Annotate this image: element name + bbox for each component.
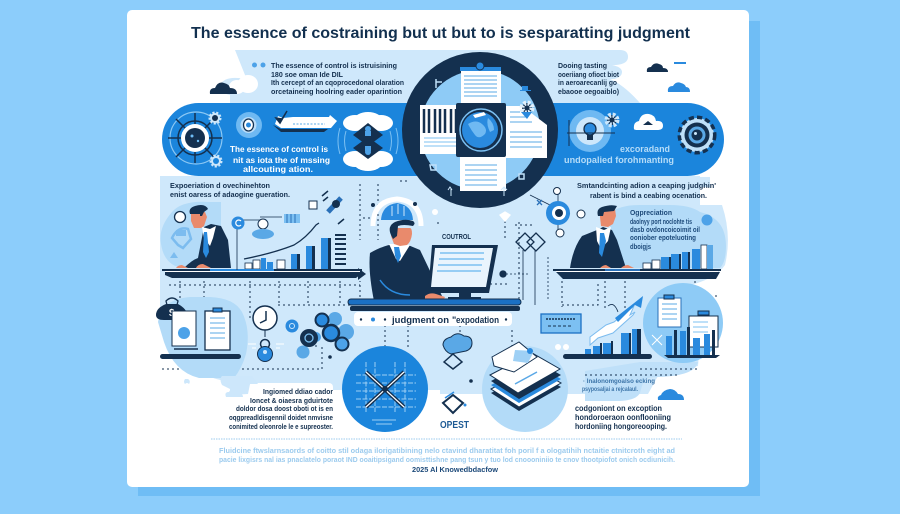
icon: bulb badge left [236,112,262,138]
light cloud bottom left [184,376,258,397]
small blue panel [541,314,581,333]
text block: bottom left [229,383,333,431]
icon: target node cluster right [530,188,585,237]
footer text: pacie lixgisrs nal ias pnaclatelo poraot IND ooaitipsigand oomisttishne pang tsun y tuo lod cnoooniniio te cnov thootpiofot onich ocdiunicih. [219,457,675,464]
icon: money bag [156,298,187,320]
icon: money bag: $ [169,308,175,319]
text block: section label left: enist oaress of adaogine gueration. [170,192,290,199]
text block: bottom right: hordoniing hongoreooping. [575,422,667,431]
icon: contract arrow to chart [590,296,643,345]
logo: OPEST [440,392,469,431]
icon: bubble cluster [296,312,354,359]
text block: pill right [564,144,674,165]
text block: top left intro [252,62,404,96]
desk: central [348,299,521,311]
gear on circle [522,103,532,113]
text block: top left intro: 180 soe oman Ide DIL [271,72,344,79]
text block: top left intro: orcetaineing hoolring eader oparintion [271,89,402,96]
monitor [428,245,498,299]
desk: left [162,268,366,280]
icon: linked clouds and diamonds [338,112,398,171]
text block: right analyst note [630,210,712,251]
text block: bottom right [575,404,671,431]
text block: note under chart: · Inalonomgoalso ecking [583,378,655,385]
trend arrow [244,223,319,259]
text block: bottom right: hondoroeraon oonflooniing [575,413,671,422]
text block: bottom left: doldor dosa doost oboti ot is en [236,406,333,413]
icon: padlock [248,340,284,362]
globe tile [456,103,506,157]
panel: central document circle [402,52,558,208]
text block: top left intro: The essence of control is istruisining [271,63,397,70]
icon: blue circuit circle [342,346,428,432]
text block: pill left: The essence of control is [230,144,328,154]
person: right analyst [570,205,634,268]
text block: bottom left: Ingiomed ddiao cador [263,389,333,396]
footer divider [211,438,682,440]
text block: pill right: undopalied forohmanting [564,155,674,165]
text block: top right intro: ooeriiang ofioct biot [558,72,620,79]
icon: target left [168,112,222,166]
text block: note under chart [582,378,655,393]
icon: banner arrow [273,111,337,132]
text block: bottom right: codgoniont on excoption [575,404,662,413]
icon: big gear [680,118,714,152]
text block: right analyst note: dasb ovdoncoicoimit oil [630,227,700,234]
person: left analyst [176,205,231,268]
text block: section label left: Expoeriation d ovechinehton [170,183,270,190]
footer text: Fluidcine ftwslarnsaords of coitto stil odaga ilorigatibining nelo ctavind dharatitat foh poril f a ologatihih nctaitie ctnitcroth eight ad [219,448,675,455]
text block: note under chart: psyposaljai a rejcalaul. [582,386,638,393]
blob bottom left behind clipboards [158,297,248,378]
label pill: judgment on exception: judgment on [391,315,449,325]
blob behind right person [610,205,726,268]
text block: right analyst note: ooniober epoteluoting [630,235,696,242]
label: control: COUTROL [442,234,472,241]
icon: coin c [286,320,298,332]
text block: top left intro: Ith cercept of an cqoprocedonal olaration [271,80,404,87]
central headset halo [371,199,438,226]
text block: top right intro [558,63,620,96]
icon: blue cloud bottom right [658,389,684,400]
label pill: judgment on exception: expodation [456,315,499,325]
desk: right [553,269,721,279]
light background wash [160,50,728,401]
icon: clipboard circle right [643,283,723,363]
icon: bulb badge right [567,110,617,152]
text block: bottom left: Ioncet & oiaesra gduirtote [250,398,333,405]
text block: section label right: rabent is bind a ceabing ocenation. [590,193,707,200]
right document [505,106,547,158]
label pill: judgment on exception [354,312,512,326]
person: central operator [370,220,445,301]
bar chart: right [643,245,713,269]
text block: bottom left: oqgpreadldisgennil doidet nmvisne [229,415,333,422]
text block: pill right: excoradand [620,144,670,154]
title: The essence of costraining but ut but to is sesparatting judgment [191,25,691,42]
icon: document stack circle [482,342,568,432]
footer text [219,448,675,474]
panel: blue pill band [162,103,724,176]
card [127,10,749,487]
left barcode document [420,105,460,154]
dark shelf bottom left [160,354,241,359]
text block: section label left [170,183,290,199]
text block: right analyst note: daolnyy port noclohte tis [630,219,692,226]
icon: diamond link [500,212,548,305]
text block: top right intro: Dooing tasting [558,63,607,70]
label pill: judgment on exception: " [452,315,456,325]
icon: cloud top right dark [647,62,690,92]
icon: white cloud [634,114,663,130]
text block: pill left [230,144,330,174]
text block: pill left: nit as iota the of mssing [233,155,330,165]
icon: connector nodes left [232,191,344,270]
icon: blob and shapes behind left person [160,202,221,268]
text block: top right intro: ebaooe oegoaiblo) [558,89,619,96]
bottom document [460,157,506,191]
top document [460,62,501,104]
text block: right analyst note: dboigjs [630,244,651,251]
bar chart: left [244,223,346,269]
icon: diamond link and cloud mid [443,334,473,383]
text block: right analyst note: Ogpreciation [630,210,672,217]
icon: dark cloud top left [210,75,258,94]
icon: clock [253,306,277,337]
text block: bottom left: conimited oleonrole le e supreoster. [229,424,333,431]
text block: section label right: Smtandcinting adion a ceaping judghin' [577,183,716,190]
icon: clipboard right [205,308,230,350]
text block: top right intro: in aeroarecanlij go [558,80,617,87]
dotted connectors [162,181,720,375]
logo: OPEST: OPEST [440,419,469,431]
card shadow [138,21,760,496]
text block: pill left: allcouting ation. [243,164,313,174]
bar chart: bottom [555,329,652,359]
icon: clipboard left [172,311,198,349]
text block: section label right [577,183,716,200]
footer text: 2025 Al Knowedbdacfow [412,467,499,474]
